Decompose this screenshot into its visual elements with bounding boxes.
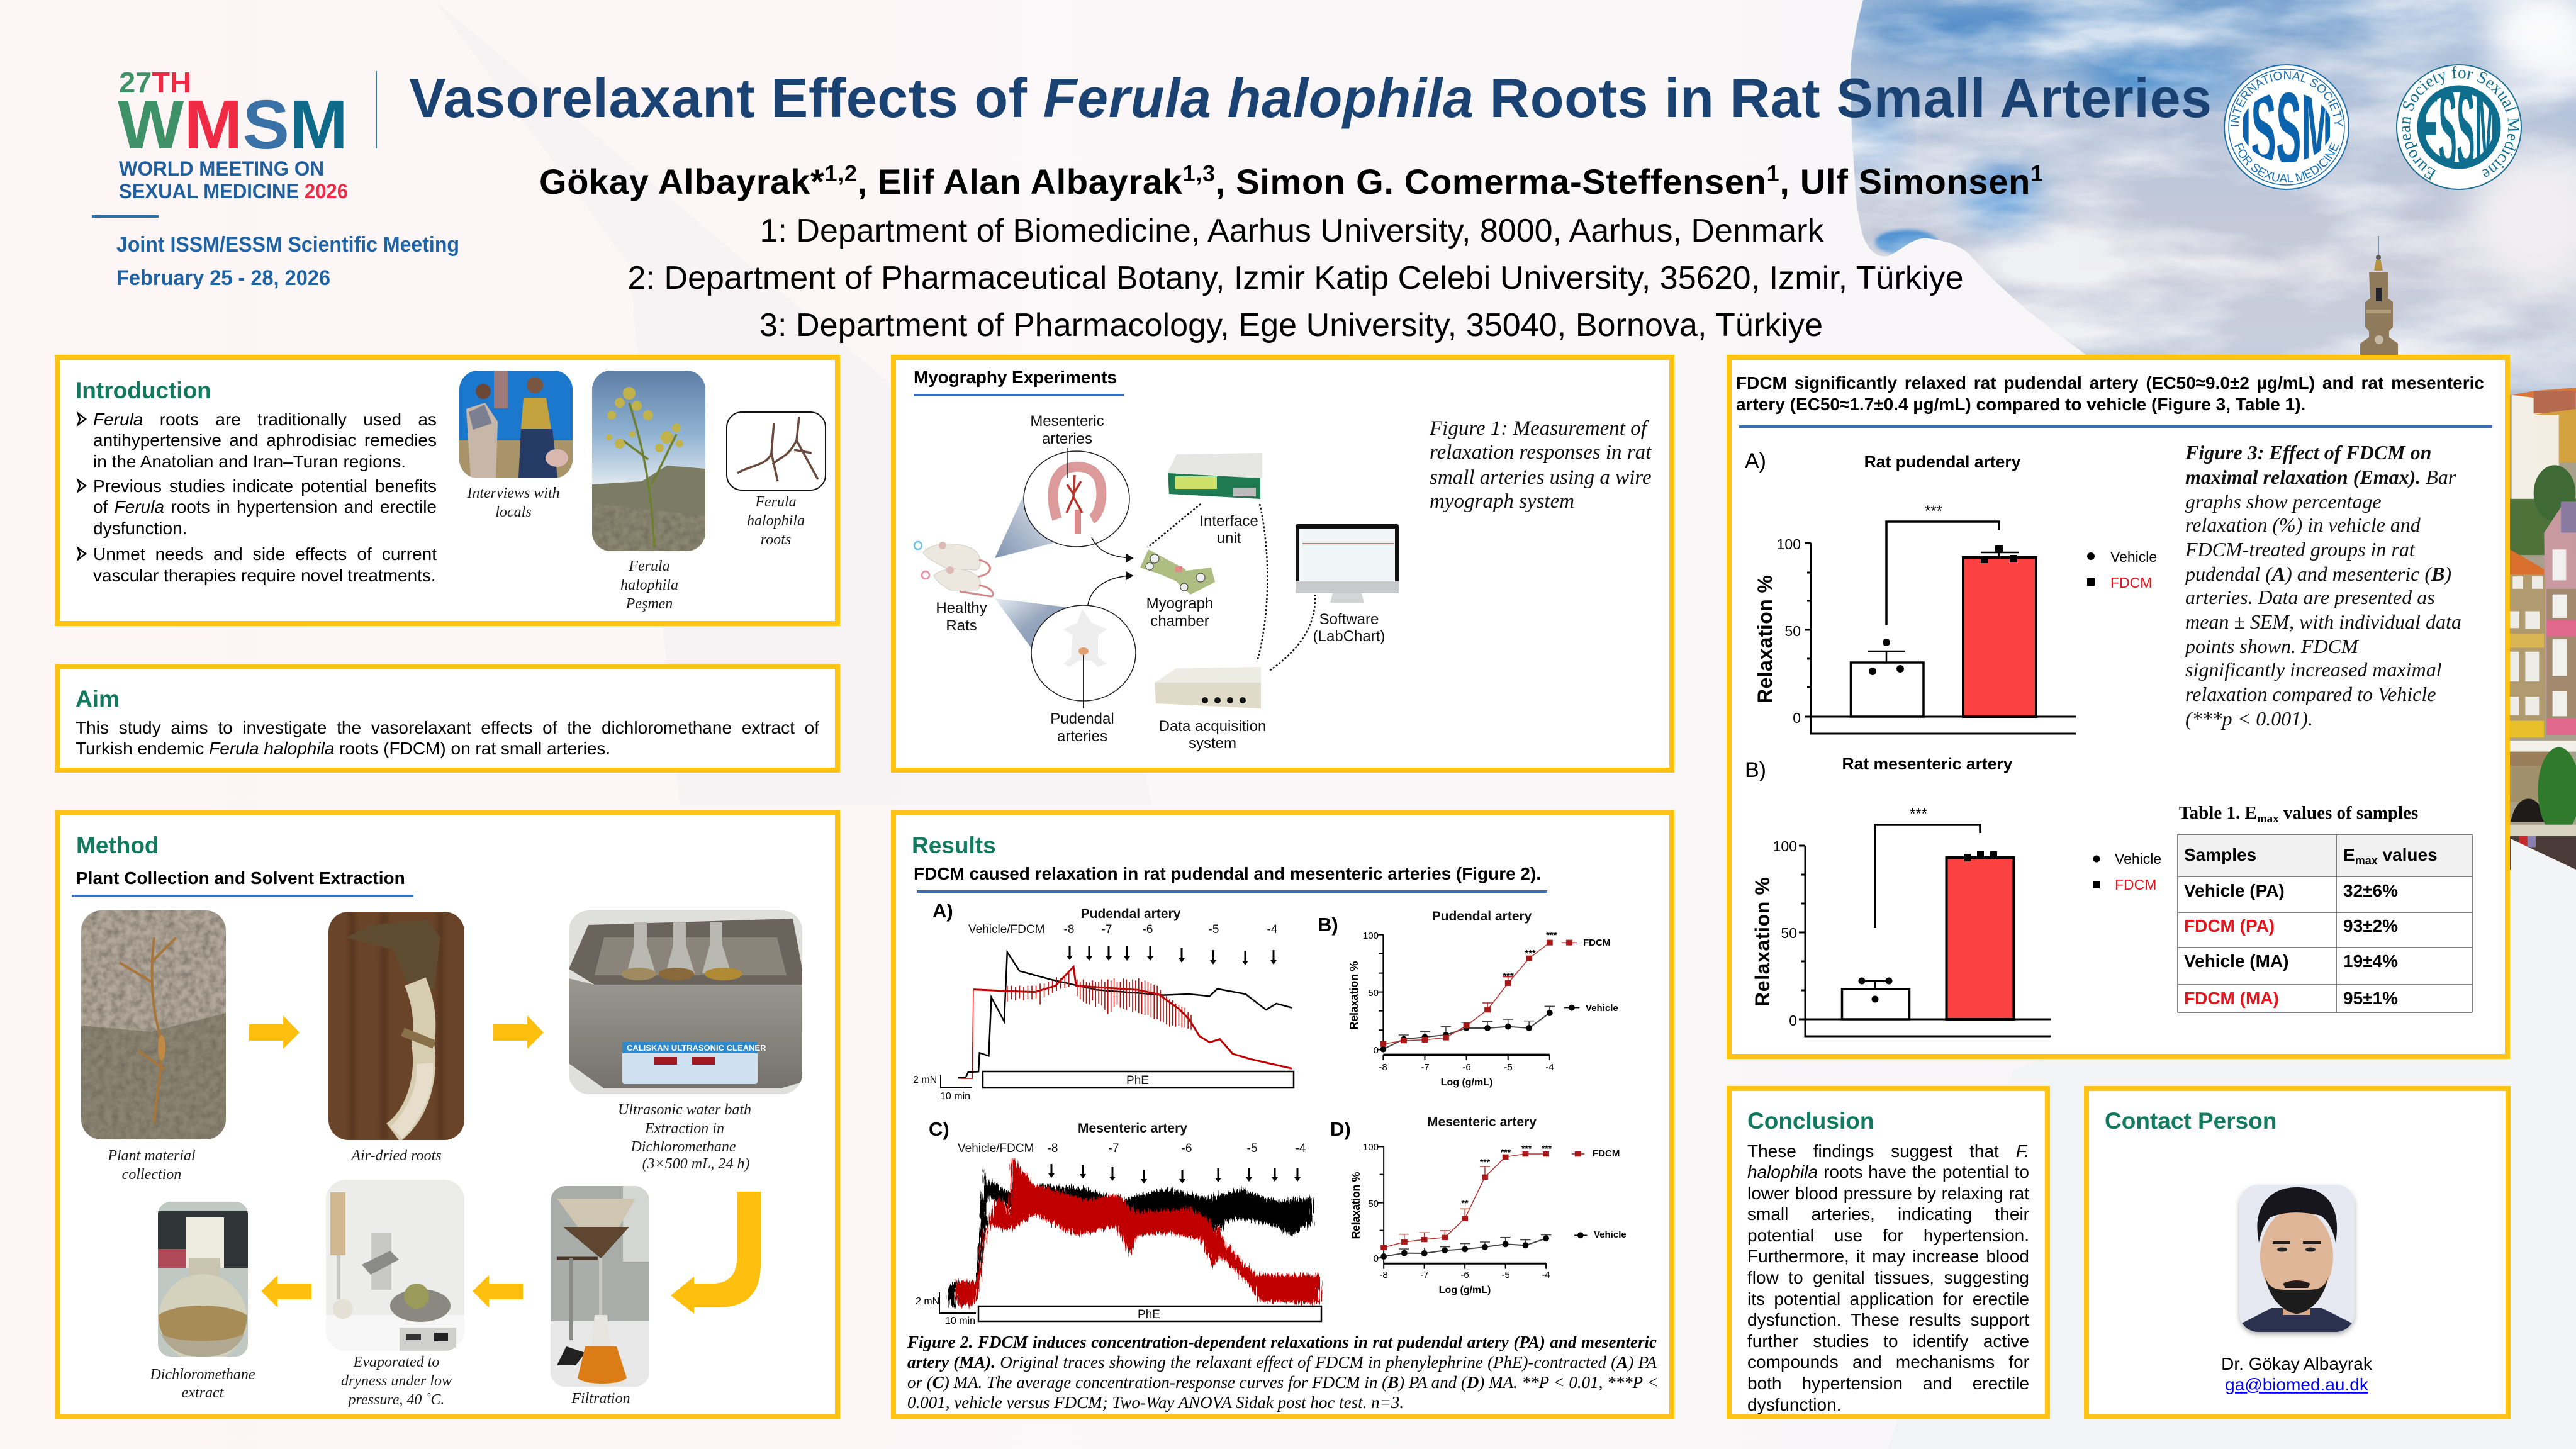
chart B: pudendal concentration-response: -6 bbox=[1462, 1062, 1471, 1073]
chart D: mesenteric concentration-response: Mesenteric artery bbox=[1427, 1115, 1537, 1129]
bar chart A: *** bbox=[1925, 503, 1942, 520]
caption: figure 3: relaxation compared to Vehicle bbox=[2185, 683, 2436, 705]
chart A: pudendal trace: Vehicle/FDCM bbox=[968, 923, 1044, 936]
caption: figure 1: Figure 1: Measurement of bbox=[1429, 417, 1649, 440]
chart A: pudendal trace: -5 bbox=[1209, 923, 1219, 936]
authors: , Elif Alan Albayrak bbox=[858, 162, 1183, 201]
chart C: mesenteric trace: 10 min bbox=[945, 1316, 975, 1326]
bar chart A: 50 bbox=[1784, 623, 1801, 639]
header: conference logo: WORLD MEETING ON bbox=[119, 157, 324, 180]
captions: method row 1: (3×500 mL, 24 h) bbox=[642, 1156, 749, 1172]
captions: intro photos: halophila bbox=[620, 577, 678, 593]
heading: results: Results bbox=[912, 832, 996, 858]
panel: aim bbox=[57, 666, 837, 770]
chart C: mesenteric trace: -5 bbox=[1247, 1142, 1257, 1155]
captions: method row 1: Extraction in bbox=[644, 1121, 724, 1137]
authors: 1 bbox=[2030, 160, 2043, 186]
chart D: mesenteric concentration-response: FDCM bbox=[1593, 1148, 1620, 1159]
authors: 1,3 bbox=[1183, 160, 1215, 186]
affiliations: 3: Department of Pharmacology, Ege University, 35040, Bornova, Türkiye bbox=[759, 307, 1823, 344]
labels: myography: Mesenteric bbox=[1030, 413, 1104, 430]
chart D: mesenteric concentration-response: *** bbox=[1480, 1157, 1491, 1167]
chart B: pudendal concentration-response: Log (g/mL) bbox=[1441, 1077, 1492, 1088]
chart A: pudendal trace: -4 bbox=[1267, 923, 1278, 936]
chart B: pudendal concentration-response: -4 bbox=[1545, 1062, 1554, 1073]
caption: figure 2: or (C) MA. The average concentration-response curves for FDCM in (B) PA and (D) MA. **P < 0.01, ***P < bbox=[907, 1373, 1657, 1392]
arrow: step 2 to 3 bbox=[493, 1015, 544, 1049]
chart C: mesenteric trace: -7 bbox=[1109, 1142, 1119, 1155]
arrow: step 1 to 2 bbox=[249, 1015, 300, 1049]
table: Emax values: 19±4% bbox=[2343, 951, 2398, 971]
captions: method row 1: Dichloromethane bbox=[630, 1139, 736, 1155]
chart B: pudendal concentration-response: 0 bbox=[1374, 1045, 1379, 1056]
caption: figure 3: relaxation (%) in vehicle and bbox=[2185, 513, 2421, 536]
chart A: pudendal trace: 2 mN bbox=[913, 1075, 937, 1085]
bullets bbox=[78, 413, 86, 559]
bar chart B: 0 bbox=[1789, 1012, 1797, 1029]
captions: method row 1: Air-dried roots bbox=[350, 1148, 442, 1164]
photo: interviews with locals bbox=[459, 371, 573, 478]
chart B: pudendal concentration-response: 50 bbox=[1368, 988, 1379, 999]
chart D: mesenteric concentration-response: Vehicle bbox=[1594, 1229, 1627, 1240]
photo: plant material bbox=[81, 910, 226, 1139]
conclusion text: both hypertension and erectile bbox=[1747, 1373, 2029, 1393]
intro text bullet 2: of Ferula roots in hypertension and erectile bbox=[93, 497, 437, 517]
bell tower bbox=[2360, 236, 2398, 356]
caption: figure 2: Figure 2. FDCM induces concentration-dependent relaxations in rat pudendal artery (PA) and mesenteric bbox=[907, 1333, 1657, 1351]
bar chart A: A) bbox=[1745, 449, 1766, 473]
logo: ESSM: European Society for Sexual Medicine bbox=[2402, 66, 2519, 181]
panel: EC50 findings and bar charts bbox=[1729, 357, 2507, 1056]
intro text bullet 2 bbox=[93, 476, 437, 541]
heading: method: Method bbox=[76, 832, 159, 858]
table: Emax values: 95±1% bbox=[2343, 988, 2398, 1008]
chart B: pudendal concentration-response: Vehicle bbox=[1586, 1003, 1618, 1014]
captions: method row 1: Plant material bbox=[107, 1148, 196, 1164]
dotted connections bbox=[1148, 504, 1315, 671]
panel: contact person bbox=[2086, 1088, 2508, 1417]
table: Emax values: values bbox=[2378, 845, 2438, 864]
arrow: curved step 3 to 4 bbox=[671, 1192, 761, 1314]
table: Emax values: 93±2% bbox=[2343, 916, 2398, 936]
icon: rats bbox=[914, 542, 993, 596]
chart C: mesenteric trace: Mesenteric artery bbox=[1078, 1121, 1187, 1136]
captions: method row 2: Dichloromethane bbox=[149, 1367, 255, 1383]
bar chart A bbox=[1745, 449, 2157, 734]
photo: ultrasonic bath: CALISKAN ULTRASONIC CLEANER bbox=[627, 1043, 766, 1053]
heading: introduction: Introduction bbox=[76, 378, 211, 403]
chart C: mesenteric trace: C) bbox=[929, 1118, 949, 1140]
authors: 1,2 bbox=[824, 160, 857, 186]
bar chart B: Rat mesenteric artery bbox=[1842, 754, 2013, 773]
chart D: mesenteric concentration-response: -7 bbox=[1420, 1270, 1429, 1280]
chart D: mesenteric concentration-response: 100 bbox=[1363, 1142, 1379, 1153]
chart C: mesenteric trace: Vehicle/FDCM bbox=[958, 1142, 1034, 1155]
caption: figure 2: artery (MA). Original traces showing the relaxant effect of FDCM in phenylephrine (PhE)-contracted (A) PA bbox=[907, 1353, 1657, 1372]
conclusion text: halophila roots have the potential to bbox=[1747, 1162, 2029, 1182]
captions: intro photos: Interviews with bbox=[466, 485, 560, 501]
conclusion text: small arteries, indicating their bbox=[1747, 1204, 2029, 1224]
chart A: pudendal trace: -7 bbox=[1102, 923, 1112, 936]
findings text bbox=[1736, 372, 2484, 417]
photo: portrait bbox=[2239, 1185, 2355, 1332]
labels: myography: Healthy bbox=[936, 600, 987, 617]
caption: figure 3: pudendal (A) and mesenteric (B) bbox=[2184, 562, 2451, 585]
labels: myography: unit bbox=[1217, 530, 1241, 547]
caption: figure 2 bbox=[907, 1332, 1657, 1415]
captions: intro photos: locals bbox=[495, 504, 532, 520]
header: conference logo: 27TH bbox=[119, 66, 191, 99]
chart A: pudendal trace: 10 min bbox=[940, 1091, 970, 1102]
panel: results bbox=[893, 813, 1672, 1417]
aim text: This study aims to investigate the vasorelaxant effects of the dichloromethane extract of bbox=[76, 717, 819, 737]
conclusion text: flow to genital tissues, suggesting bbox=[1747, 1268, 2029, 1287]
table: Emax values: Vehicle (MA) bbox=[2184, 951, 2288, 971]
authors: 1 bbox=[1767, 160, 1779, 186]
chart B: pudendal concentration-response: FDCM bbox=[1583, 937, 1610, 948]
labels: myography: Rats bbox=[946, 617, 977, 634]
caption: figure 1 bbox=[1429, 417, 1652, 513]
chart C: mesenteric trace: -8 bbox=[1048, 1142, 1058, 1155]
device: interface unit bbox=[1167, 453, 1262, 499]
intro text bullet 3: vascular therapies require novel treatments. bbox=[93, 566, 436, 585]
bar chart B: FDCM bbox=[2115, 876, 2156, 893]
chart D: mesenteric concentration-response: -6 bbox=[1460, 1270, 1469, 1280]
header: conference logo: Joint ISSM/ESSM Scientific Meeting bbox=[116, 233, 459, 257]
chart C: mesenteric trace bbox=[916, 1118, 1321, 1326]
logo: ISSM: INTERNATIONAL SOCIETY bbox=[2231, 70, 2343, 126]
heading: myography: Myography Experiments bbox=[914, 367, 1117, 387]
chart C: mesenteric trace: -4 bbox=[1296, 1142, 1306, 1155]
panel: introduction bbox=[57, 357, 837, 624]
labels: myography: arteries bbox=[1042, 430, 1092, 447]
caption: figure 3 bbox=[2184, 441, 2461, 730]
labels: myography: (LabChart) bbox=[1313, 628, 1385, 645]
bar chart B: *** bbox=[1910, 805, 1927, 822]
conclusion text: These findings suggest that F. bbox=[1747, 1141, 2029, 1160]
title: Vasorelaxant Effects of Ferula halophila Roots in Rat Small Arteries bbox=[409, 67, 2212, 129]
intro text bullet 1: Ferula roots are traditionally used as bbox=[93, 409, 437, 429]
caption: figure 3: maximal relaxation (Emax). Bar bbox=[2185, 466, 2456, 488]
header: conference logo bbox=[92, 66, 459, 290]
caption: figure 3: significantly increased maximal bbox=[2185, 658, 2442, 681]
conclusion text bbox=[1747, 1140, 2029, 1421]
caption: figure 3: FDCM-treated groups in rat bbox=[2185, 538, 2416, 561]
bar chart A: FDCM bbox=[2110, 574, 2152, 591]
chart B: pudendal concentration-response: -8 bbox=[1379, 1062, 1387, 1073]
table title: max bbox=[2257, 812, 2279, 825]
aim text bbox=[76, 717, 819, 761]
caption: figure 3: (***p < 0.001). bbox=[2185, 707, 2313, 730]
conclusion text: further studies to identify active bbox=[1747, 1331, 2029, 1351]
device: myograph chamber bbox=[1140, 549, 1215, 595]
caption: figure 3: mean ± SEM, with individual data bbox=[2185, 610, 2461, 633]
results subheading: FDCM caused relaxation in rat pudendal and mesenteric arteries (Figure 2). bbox=[914, 864, 1541, 883]
circle: pudendal arteries bbox=[1031, 605, 1136, 708]
chart D: mesenteric concentration-response: *** bbox=[1542, 1143, 1552, 1153]
chart D: mesenteric concentration-response: Log (g/mL) bbox=[1439, 1285, 1491, 1295]
table: Emax values: max bbox=[2355, 854, 2378, 867]
chart B: pudendal concentration-response: -7 bbox=[1421, 1062, 1430, 1073]
logo: ISSM bbox=[2224, 64, 2349, 190]
bar chart A: Relaxation % bbox=[1754, 575, 1776, 703]
table: Emax values: FDCM (PA) bbox=[2184, 916, 2275, 936]
affiliations: 1: Department of Biomedicine, Aarhus University, 8000, Aarhus, Denmark bbox=[760, 213, 1825, 249]
captions: intro photos: Ferula bbox=[628, 558, 670, 574]
caption: figure 3: arteries. Data are presented as bbox=[2185, 586, 2435, 608]
labels: myography: Myograph bbox=[1146, 595, 1213, 612]
captions: method row 2: dryness under low bbox=[341, 1373, 452, 1389]
captions: intro photos: Peşmen bbox=[625, 596, 673, 612]
bar chart B bbox=[1745, 754, 2161, 1036]
conclusion text: lower blood pressure by relaxing rat bbox=[1747, 1183, 2029, 1203]
photo: ultrasonic bath bbox=[569, 910, 802, 1094]
intro text bullet 1: in the Anatolian and Iran–Turan regions. bbox=[93, 452, 406, 471]
bar chart B: 50 bbox=[1781, 925, 1797, 941]
caption: figure 1: small arteries using a wire bbox=[1430, 466, 1652, 489]
captions: method row 2: Evaporated to bbox=[353, 1354, 439, 1370]
chart D: mesenteric concentration-response: *** bbox=[1501, 1147, 1511, 1157]
bar chart B: B) bbox=[1745, 758, 1766, 782]
contact email: ga@biomed.au.dk bbox=[2225, 1375, 2369, 1394]
heading: aim: Aim bbox=[76, 686, 120, 712]
caption: figure 1: myograph system bbox=[1430, 490, 1574, 513]
heading: conclusion: Conclusion bbox=[1747, 1108, 1874, 1134]
bar chart B: Relaxation % bbox=[1751, 877, 1774, 1007]
caption: figure 3: points shown. FDCM bbox=[2184, 635, 2360, 657]
labels: myography bbox=[936, 413, 1385, 752]
chart D: mesenteric concentration-response: -8 bbox=[1379, 1270, 1388, 1280]
bar chart A: Rat pudendal artery bbox=[1864, 452, 2021, 471]
buildings strip bbox=[2510, 388, 2576, 870]
chart D: mesenteric concentration-response: D) bbox=[1330, 1118, 1351, 1140]
chart B: pudendal concentration-response: *** bbox=[1503, 971, 1514, 982]
chart D: mesenteric concentration-response bbox=[1330, 1115, 1627, 1295]
arrows to chamber bbox=[1088, 537, 1133, 605]
table: Emax values bbox=[2178, 834, 2472, 1012]
photo: dichloromethane extract bbox=[158, 1202, 248, 1362]
affiliations: 2: Department of Pharmaceutical Botany, Izmir Katip Celebi University, 35620, Izmir, Türkiye bbox=[628, 260, 1963, 296]
panel: method bbox=[57, 813, 837, 1417]
intro text bullet 1: antihypertensive and aphrodisiac remedies bbox=[93, 430, 437, 450]
header: conference logo: SEXUAL MEDICINE 2026 bbox=[119, 180, 348, 203]
captions: intro photos: roots bbox=[761, 532, 791, 548]
circle: mesenteric arteries bbox=[1024, 448, 1129, 547]
chart D: mesenteric concentration-response: 50 bbox=[1368, 1199, 1379, 1209]
labels: myography: Data acquisition bbox=[1159, 718, 1266, 735]
chart B: pudendal concentration-response bbox=[1318, 909, 1618, 1088]
chart B: pudendal concentration-response: *** bbox=[1546, 930, 1557, 941]
labels: myography: Pudendal bbox=[1050, 710, 1114, 727]
bottom-right white cut bbox=[2511, 839, 2576, 1449]
table: Emax values: Samples bbox=[2184, 845, 2256, 864]
captions: method row 1 bbox=[107, 1102, 751, 1183]
chart B: pudendal concentration-response: -5 bbox=[1504, 1062, 1513, 1073]
arrow: step 4 to 5 bbox=[473, 1275, 523, 1307]
labels: myography: Interface bbox=[1199, 513, 1258, 530]
chart A: pudendal trace: Pudendal artery bbox=[1081, 907, 1181, 921]
poster canvas: ISSM bbox=[2241, 71, 2332, 187]
logo: ISSM: FOR SEXUAL MEDICINE bbox=[2234, 142, 2339, 182]
device: monitor with LabChart bbox=[1296, 524, 1399, 603]
bar chart B: Vehicle bbox=[2115, 851, 2161, 867]
bar chart A: 0 bbox=[1793, 710, 1801, 726]
table: Emax values: 32±6% bbox=[2343, 881, 2398, 900]
table: Emax values: E bbox=[2343, 845, 2355, 864]
intro text bullet 2: dysfunction. bbox=[93, 518, 187, 538]
labels: myography: chamber bbox=[1150, 613, 1209, 630]
chart B: pudendal concentration-response: Pudendal artery bbox=[1432, 909, 1532, 924]
authors: , Simon G. Comerma-Steffensen bbox=[1216, 162, 1766, 201]
chart D: mesenteric concentration-response: Relaxation % bbox=[1350, 1172, 1362, 1239]
intro text bullet 1 bbox=[93, 409, 437, 474]
photo: filtration bbox=[551, 1186, 649, 1387]
authors: Gökay Albayrak* bbox=[539, 162, 824, 201]
arrow: step 5 to 6 bbox=[261, 1275, 311, 1307]
chart C: mesenteric trace: 2 mN bbox=[916, 1296, 939, 1307]
table title: Table 1. E bbox=[2179, 803, 2257, 823]
chart A: pudendal trace: PhE bbox=[1126, 1074, 1149, 1087]
conclusion text: dysfunction. bbox=[1747, 1395, 1841, 1414]
conclusion text: dysfunction. These results support bbox=[1747, 1310, 2029, 1329]
captions: intro photos: Ferula bbox=[754, 494, 797, 510]
chart B: pudendal concentration-response: 100 bbox=[1363, 931, 1379, 941]
photo: rotary evaporation bbox=[326, 1180, 464, 1351]
device: data acquisition system bbox=[1155, 667, 1261, 708]
aim text: Turkish endemic Ferula halophila roots (FDCM) on rat small arteries. bbox=[76, 739, 610, 758]
captions: method row 2: extract bbox=[182, 1385, 225, 1401]
captions: method row 2: pressure, 40 ˚C. bbox=[347, 1392, 444, 1408]
panel: myography experiments bbox=[893, 357, 1672, 770]
table: Emax values: FDCM (MA) bbox=[2184, 988, 2279, 1008]
header: conference logo: February 25 - 28, 2026 bbox=[116, 266, 330, 290]
conclusion text: potential use for hypertension. bbox=[1747, 1226, 2029, 1245]
contact name: Dr. Gökay Albayrak bbox=[2221, 1354, 2373, 1373]
caption: figure 3: graphs show percentage bbox=[2185, 490, 2382, 513]
conclusion text: Furthermore, it may increase blood bbox=[1747, 1246, 2029, 1266]
chart A: pudendal trace bbox=[913, 900, 1294, 1102]
captions: method row 1: Ultrasonic water bath bbox=[618, 1102, 751, 1118]
captions: method row 2: Filtration bbox=[571, 1390, 630, 1407]
labels: myography: Software bbox=[1319, 611, 1379, 628]
chart B: pudendal concentration-response: Relaxation % bbox=[1348, 961, 1360, 1029]
caption: figure 2: 0.001, vehicle versus FDCM; Two-Way ANOVA Sidak post hoc test. n=3. bbox=[907, 1393, 1404, 1412]
chart B: pudendal concentration-response: *** bbox=[1525, 948, 1536, 959]
labels: myography: system bbox=[1189, 735, 1236, 752]
chart C: mesenteric trace: -6 bbox=[1182, 1142, 1192, 1155]
labels: myography: arteries bbox=[1057, 728, 1107, 745]
photo: Ferula roots bbox=[727, 412, 826, 490]
chart A: pudendal trace: -8 bbox=[1064, 923, 1074, 936]
caption: figure 3: Figure 3: Effect of FDCM on bbox=[2185, 441, 2431, 464]
chart A: pudendal trace: A) bbox=[932, 900, 953, 922]
intro text bullet 2: Previous studies indicate potential benefits bbox=[93, 476, 437, 496]
captions: intro photos bbox=[466, 485, 805, 612]
chart B: pudendal concentration-response: B) bbox=[1318, 914, 1338, 936]
authors: , Ulf Simonsen bbox=[1779, 162, 2030, 201]
chart C: mesenteric trace: PhE bbox=[1138, 1308, 1160, 1321]
chart D: mesenteric concentration-response: ** bbox=[1462, 1198, 1469, 1208]
chart A: pudendal trace: -6 bbox=[1143, 923, 1153, 936]
heading: contact: Contact Person bbox=[2105, 1108, 2276, 1134]
captions: method row 2 bbox=[149, 1354, 630, 1408]
caption: figure 1: relaxation responses in rat bbox=[1430, 441, 1652, 464]
intro text bullet 3: Unmet needs and side effects of current bbox=[93, 544, 437, 564]
sky and clouds bbox=[1850, 0, 2576, 395]
chart D: mesenteric concentration-response: -4 bbox=[1542, 1270, 1550, 1280]
findings text: FDCM significantly relaxed rat pudendal artery (EC50≈9.0±2 µg/mL) and rat mesenteric bbox=[1736, 373, 2484, 393]
bar chart A: Vehicle bbox=[2110, 549, 2157, 565]
chart D: mesenteric concentration-response: 0 bbox=[1374, 1253, 1379, 1264]
photo: Ferula plant bbox=[592, 371, 705, 551]
captions: method row 1: collection bbox=[122, 1166, 181, 1183]
conclusion text: its potential application for erectile bbox=[1747, 1289, 2029, 1309]
table title: values of samples bbox=[2279, 803, 2418, 823]
bar chart B: 100 bbox=[1773, 838, 1797, 854]
table: Emax values: Vehicle (PA) bbox=[2184, 881, 2285, 900]
header: conference logo: WMSM bbox=[118, 86, 348, 164]
findings text: artery (EC50≈1.7±0.4 µg/mL) compared to vehicle (Figure 3, Table 1). bbox=[1736, 394, 2305, 414]
panel: conclusion bbox=[1729, 1088, 2047, 1421]
subheading: plant collection: Plant Collection and Solvent Extraction bbox=[76, 868, 405, 888]
chart D: mesenteric concentration-response: -5 bbox=[1501, 1270, 1510, 1280]
intro text bullet 3 bbox=[93, 544, 437, 588]
conclusion text: compounds and mechanisms for bbox=[1747, 1352, 2029, 1372]
affiliations bbox=[628, 213, 1963, 344]
captions: intro photos: halophila bbox=[747, 513, 805, 529]
photo: air-dried roots bbox=[328, 912, 464, 1140]
bar chart A: 100 bbox=[1777, 536, 1801, 552]
cones from rats to vessels bbox=[995, 492, 1066, 648]
chart D: mesenteric concentration-response: *** bbox=[1521, 1143, 1532, 1153]
